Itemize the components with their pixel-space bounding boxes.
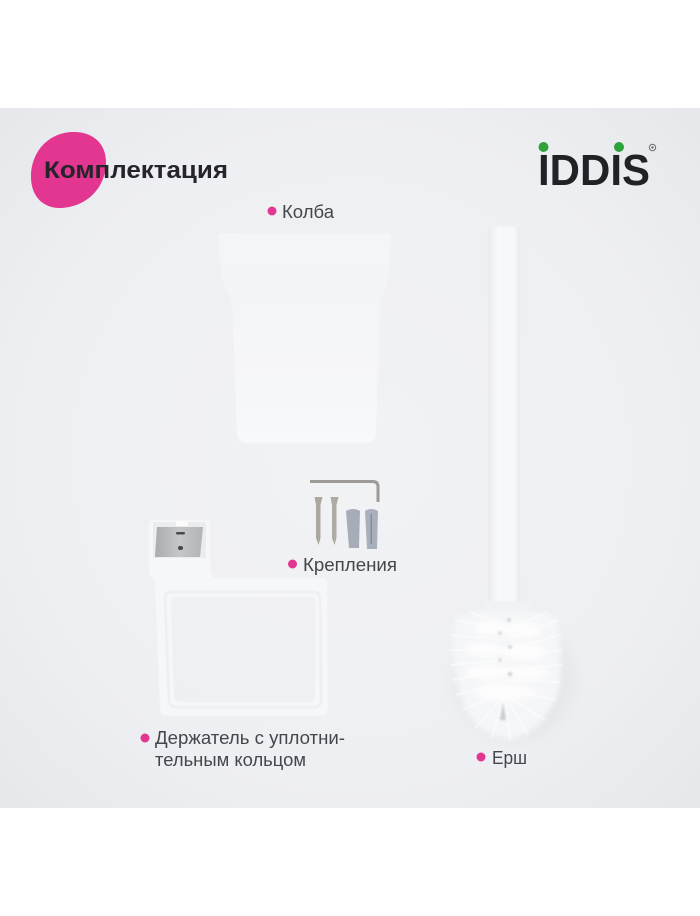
holder frame: [149, 520, 328, 716]
background panel: [0, 108, 700, 808]
label: Держатель с уплотнительным кольцом: Держатель с уплотни-: [155, 728, 345, 748]
fasteners: [310, 482, 378, 549]
wall plugs: [346, 509, 378, 549]
toilet brush: [450, 227, 575, 740]
label: Держатель с уплотнительным кольцом: тельным кольцом: [155, 750, 306, 770]
bristles: [450, 609, 562, 740]
label: Крепления: Крепления: [303, 555, 397, 575]
label: Колба: Колба: [282, 202, 335, 222]
label: Держатель с уплотнительным кольцом: [140, 728, 345, 770]
heading: Комплектация with pink blob: [31, 132, 228, 208]
logo: IDDIS: IDDIS: [538, 146, 650, 195]
heading text: Комплектация: [44, 157, 228, 184]
glass cup: [218, 233, 391, 443]
label: Ерш: [476, 748, 527, 768]
screws: [314, 497, 338, 545]
sealing ring: [165, 592, 321, 707]
hex key: [310, 482, 378, 502]
mounting plate: [153, 521, 206, 558]
handle: [488, 227, 520, 602]
label: Ерш: Ерш: [492, 748, 527, 768]
pink blob: [31, 132, 106, 208]
holder with sealing ring: [149, 520, 328, 716]
collar: [483, 601, 531, 609]
